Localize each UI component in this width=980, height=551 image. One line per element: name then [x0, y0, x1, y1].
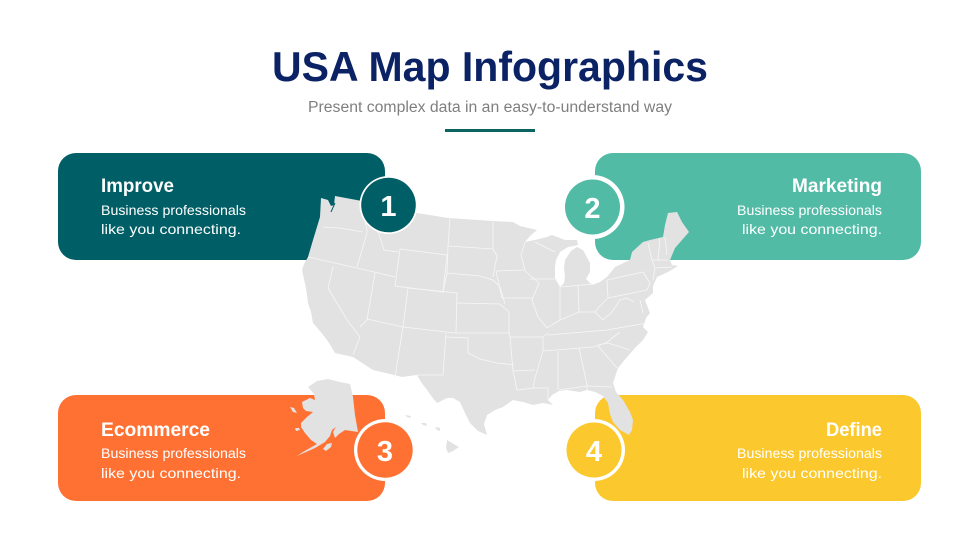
panel heading: ecommerce: Ecommerce [101, 420, 210, 441]
panel text: ecommerce [101, 445, 246, 481]
badge 3 [354, 419, 416, 481]
panel: ecommerce [58, 395, 385, 501]
panel text: define [737, 445, 882, 481]
panel heading: improve: Improve [101, 176, 174, 197]
badge 4 [563, 419, 625, 481]
panel text: ecommerce: Business professionals [101, 445, 246, 461]
panel text: ecommerce: like you connecting. [101, 465, 241, 481]
badge 1: 1 [380, 191, 397, 223]
usa map [290, 196, 689, 456]
map: puget sound [331, 203, 335, 212]
badge 2 [560, 175, 624, 239]
badge 4: 4 [586, 436, 602, 468]
panel text: improve [101, 202, 246, 237]
map: state borders [308, 203, 672, 400]
panel heading: marketing: Marketing [792, 176, 882, 197]
panel text: marketing: Business professionals [737, 202, 882, 218]
panel heading: define: Define [826, 420, 882, 441]
panel text: define: like you connecting. [742, 465, 882, 481]
map: alaska [290, 379, 358, 456]
title: USA Map Infographics [272, 43, 708, 90]
panel text: marketing: like you connecting. [742, 221, 882, 237]
panel text: improve: like you connecting. [101, 221, 241, 237]
panel text: improve: Business professionals [101, 202, 246, 218]
badge 1 [360, 176, 418, 234]
panel: marketing [595, 153, 921, 260]
map: hawaii [405, 415, 459, 453]
map: contiguous states [302, 196, 689, 435]
subtitle: Present complex data in an easy-to-understand way [308, 99, 672, 116]
panel text: define: Business professionals [737, 445, 882, 461]
title divider [445, 129, 535, 132]
badge 3: 3 [377, 436, 393, 468]
panel text: marketing [737, 202, 882, 237]
panel: define [595, 395, 921, 501]
panel: improve [58, 153, 385, 260]
badge 2: 2 [584, 193, 601, 225]
